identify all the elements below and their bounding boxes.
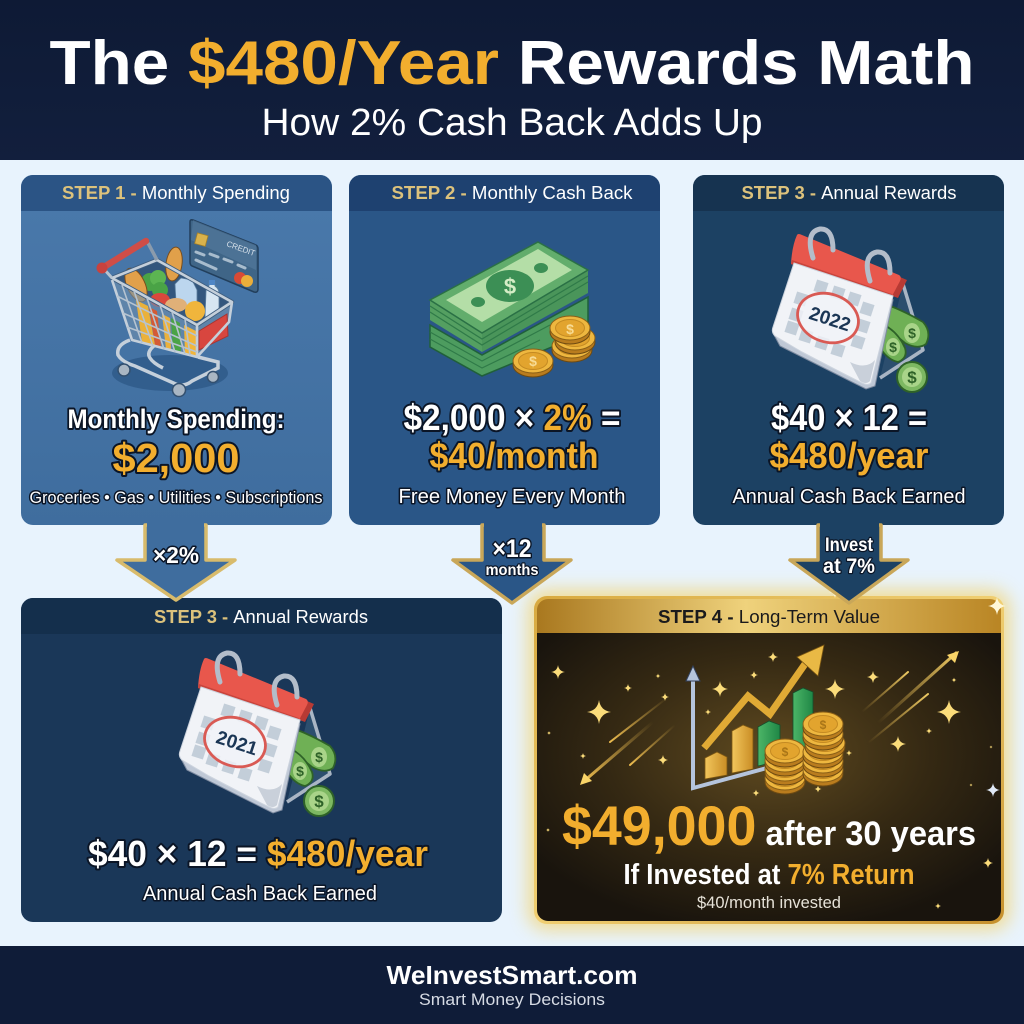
panel: step 1 monthly spending xyxy=(21,175,332,525)
frame behind the basket xyxy=(118,340,218,385)
header banner xyxy=(0,0,1024,160)
panel: step 4 long-term value xyxy=(528,586,1010,930)
icon: calendar 2021: 2021 xyxy=(213,727,260,760)
annual calculation: $40 × 12 = xyxy=(771,397,927,438)
cash back calculation: $2,000 × 2% = xyxy=(404,397,620,438)
icon: calendar 2022: $ xyxy=(908,325,916,341)
arrow sublabel: months: months xyxy=(486,562,539,579)
icon: cash stacks and coins: $ xyxy=(504,274,516,299)
chart: rising bars, trend arrow and coin stacks: $ xyxy=(782,745,789,759)
arrow: step 1 to annual rewards xyxy=(117,523,235,600)
icon: calendar 2022 xyxy=(772,229,928,392)
icon: calendar 2021: $ xyxy=(315,749,323,765)
arrow label: times 2 percent: ×2% xyxy=(153,542,199,568)
subtitle: How 2% Cash Back Adds Up xyxy=(262,102,762,144)
panel: step 2 monthly cash back xyxy=(349,175,660,525)
icon: calendar 2021: $ xyxy=(296,763,304,779)
icon: credit card xyxy=(190,220,258,292)
sparkles xyxy=(546,586,1006,909)
icon: calendar 2022: $ xyxy=(907,368,917,387)
chart: rising bars, trend arrow and coin stacks xyxy=(686,645,845,794)
icon: shopping cart xyxy=(96,241,232,396)
panel: step 3 annual rewards (2021) xyxy=(21,598,502,922)
icon: credit card: CREDIT xyxy=(225,239,256,258)
spending categories: Groceries • Gas • Utilities • Subscriptions xyxy=(30,488,322,507)
footer brand: WeInvestSmart.com xyxy=(386,960,638,990)
arrow: step 2 to step 3 xyxy=(453,523,571,603)
basket front and side xyxy=(112,280,197,357)
icon: calendar 2022: $ xyxy=(889,339,897,355)
step 1 heading: STEP 1 - Monthly Spending xyxy=(62,183,290,203)
cash back caption: Free Money Every Month xyxy=(398,486,626,508)
arrow label: times 12 months: ×12 xyxy=(492,535,532,563)
arrow sublabel: at 7 percent: at 7% xyxy=(823,555,875,578)
spending amount: $2,000 xyxy=(112,435,240,481)
lower annual calculation: $40 × 12 = $480/year xyxy=(88,833,428,874)
long-term amount: $49,000 after 30 years xyxy=(562,794,976,857)
spending label: Monthly Spending: xyxy=(68,404,284,434)
icon: calendar 2021 xyxy=(179,653,335,816)
annual result: $480/year xyxy=(770,435,928,476)
annual caption: Annual Cash Back Earned xyxy=(732,486,966,508)
arrow label: invest: Invest xyxy=(825,535,874,556)
icon: cash stacks and coins xyxy=(430,242,595,377)
long-term condition: If Invested at 7% Return xyxy=(624,859,914,891)
lower step 3 heading: STEP 3 - Annual Rewards xyxy=(154,607,368,627)
icon: cash stacks and coins: $ xyxy=(566,321,574,337)
step 2 heading: STEP 2 - Monthly Cash Back xyxy=(392,183,634,203)
shooting star streaks xyxy=(580,651,959,785)
lower annual caption: Annual Cash Back Earned xyxy=(143,883,377,905)
step 3 heading: STEP 3 - Annual Rewards xyxy=(742,183,956,203)
icon: cash stacks and coins: $ xyxy=(529,353,537,369)
panel: step 3 annual rewards (2022) xyxy=(693,175,1004,525)
footer banner xyxy=(0,946,1024,1024)
monthly cash back result: $40/month xyxy=(430,435,598,476)
icon: calendar 2021: $ xyxy=(314,792,324,811)
step 4 heading: STEP 4 - Long-Term Value xyxy=(658,607,880,627)
icon: calendar 2022: 2022 xyxy=(806,303,853,336)
long-term footnote: $40/month invested xyxy=(697,893,841,912)
arrow: step 3 to step 4 xyxy=(790,523,908,603)
title: The $480/Year Rewards Math xyxy=(50,29,975,98)
chart: rising bars, trend arrow and coin stacks: $ xyxy=(820,718,827,732)
footer tagline: Smart Money Decisions xyxy=(419,990,605,1009)
